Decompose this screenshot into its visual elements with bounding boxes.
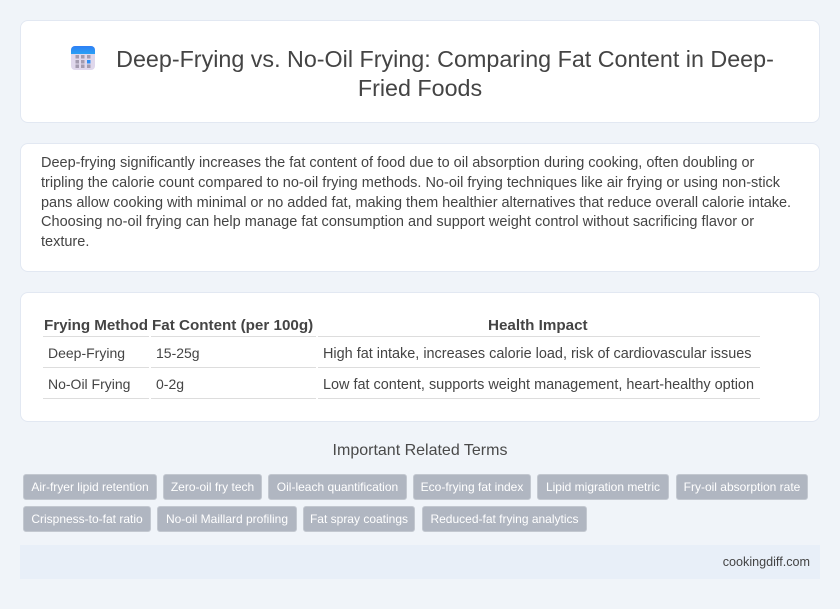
comparison table bbox=[43, 317, 760, 399]
table row: no-oil frying bbox=[48, 376, 754, 393]
heading: important related terms: Important Related Terms bbox=[333, 442, 507, 459]
table row: no-oil frying: No-Oil Frying bbox=[48, 376, 130, 392]
text block: introduction: pans allow cooking with minimal or no added fat, making them healthier alternatives that reduce overall calorie intake. bbox=[41, 195, 791, 211]
tags: related terms: Crispness-to-fat ratio bbox=[31, 512, 143, 526]
tags: related terms bbox=[23, 474, 808, 532]
tags: related terms: Fry-oil absorption rate bbox=[684, 480, 800, 494]
tags: related terms: Zero-oil fry tech bbox=[171, 480, 254, 494]
table header: Fat Content (per 100g) bbox=[152, 317, 313, 334]
panel: title card bbox=[20, 20, 820, 123]
tags: related terms: Fat spray coatings bbox=[310, 512, 408, 526]
table header bbox=[44, 317, 588, 334]
table header: Frying Method bbox=[44, 317, 148, 334]
text block: introduction bbox=[41, 155, 791, 250]
icon: calendar bbox=[71, 46, 95, 70]
table row: no-oil frying: 0-2g bbox=[156, 376, 184, 392]
panel: comparison table bbox=[20, 292, 820, 422]
footer bar bbox=[20, 545, 820, 579]
text block: introduction: texture. bbox=[41, 234, 89, 250]
text block: introduction: Deep-frying significantly increases the fat content of food due to oil absorption during cooking, often doubling or bbox=[41, 155, 754, 171]
footer source: cookingdiff.com bbox=[723, 555, 810, 569]
table row: deep-frying: High fat intake, increases calorie load, risk of cardiovascular issues bbox=[323, 346, 752, 362]
table row: deep-frying: Deep-Frying bbox=[48, 345, 125, 361]
tags: related terms: Oil-leach quantification bbox=[277, 480, 398, 494]
title: Fried Foods bbox=[358, 75, 482, 101]
tags: related terms: No-oil Maillard profiling bbox=[166, 512, 288, 526]
text block: introduction: Choosing no-oil frying can help manage fat consumption and support weight control without sacrificing flavor or bbox=[41, 214, 754, 230]
table row: no-oil frying: Low fat content, supports weight management, heart-healthy option bbox=[323, 377, 754, 393]
panel: introduction bbox=[20, 143, 820, 272]
tags: related terms: Lipid migration metric bbox=[546, 480, 660, 494]
title bbox=[116, 46, 774, 101]
tags: related terms: Eco-frying fat index bbox=[421, 480, 523, 494]
title: Deep-Frying vs. No-Oil Frying: Comparing Fat Content in Deep- bbox=[116, 46, 774, 72]
table row: deep-frying: 15-25g bbox=[156, 345, 200, 361]
tags: related terms: Reduced-fat frying analytics bbox=[430, 512, 579, 526]
text block: introduction: tripling the calorie count compared to no-oil frying methods. No-oil frying techniques like air frying or using non-stick bbox=[41, 175, 780, 191]
table header: Health Impact bbox=[488, 317, 588, 334]
table row: deep-frying bbox=[48, 345, 752, 362]
tags: related terms: Air-fryer lipid retention bbox=[31, 480, 149, 494]
